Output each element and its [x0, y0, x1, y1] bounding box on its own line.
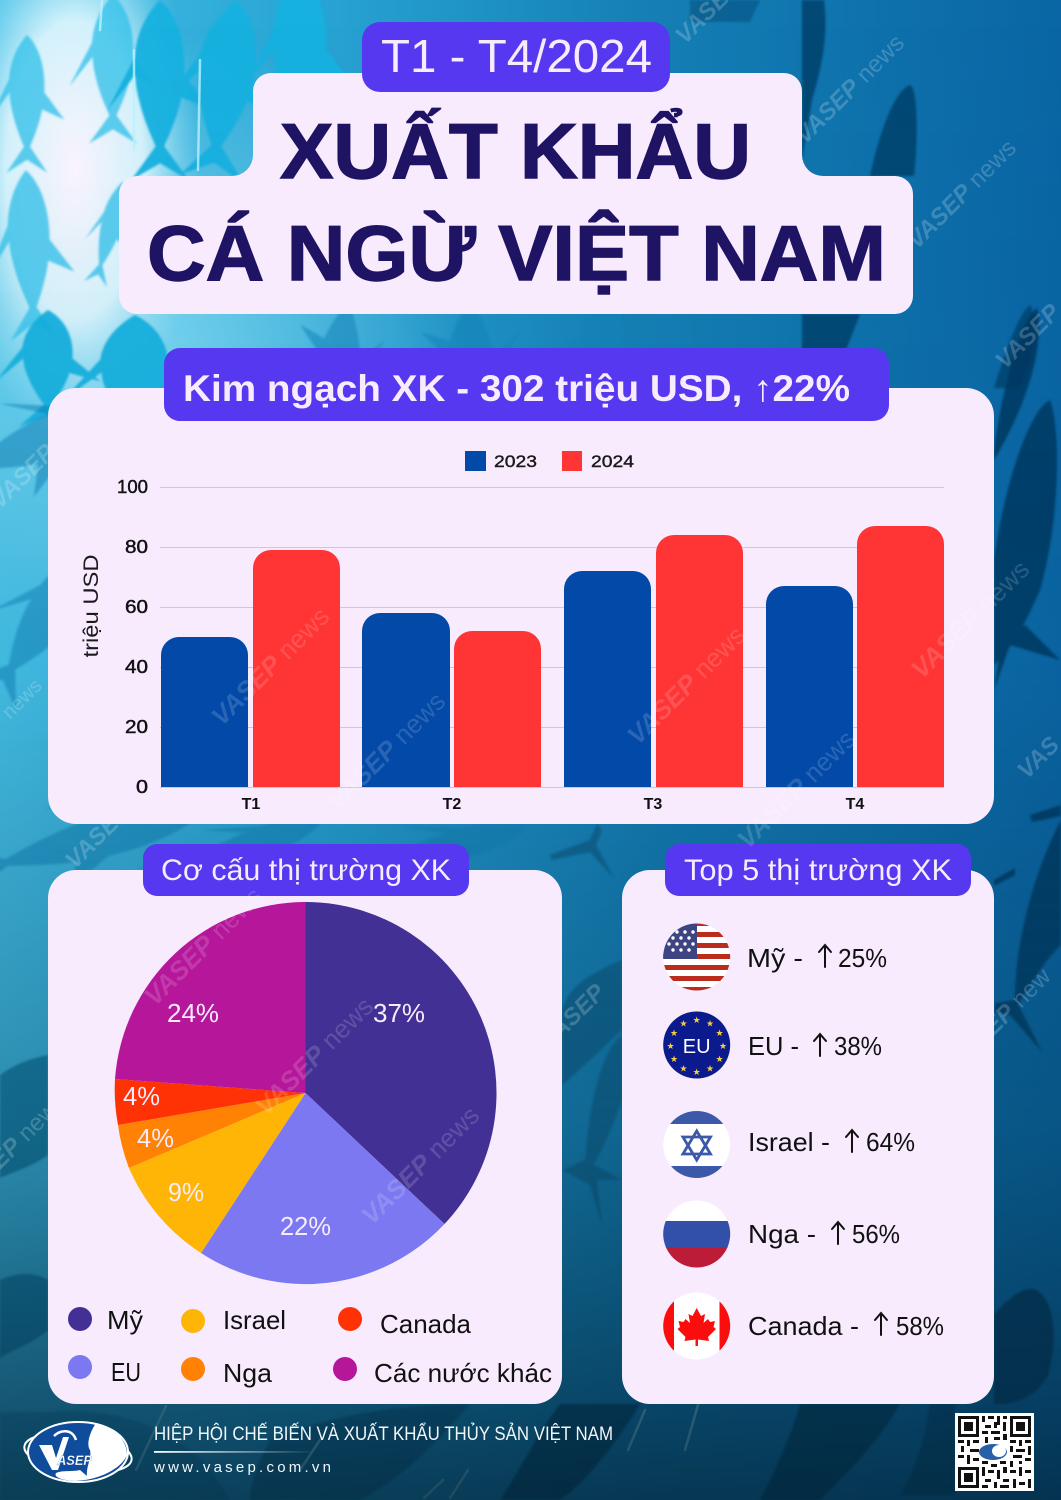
pie legend: Nga — [223, 1358, 273, 1388]
light fish top left — [0, 0, 156, 342]
icon: EU flag: ★ — [715, 1054, 724, 1064]
y axis — [117, 477, 148, 797]
icon: EU flag: ★ — [693, 1067, 701, 1077]
pie legend: Canada — [380, 1309, 472, 1339]
footer text: HIỆP HỘI CHẾ BIẾN VÀ XUẤT KHẨU THỦY SẢN VIỆT NAM — [154, 1423, 613, 1445]
icon: EU flag: ★ — [719, 1041, 727, 1051]
pie chart: 22% — [280, 1211, 331, 1241]
panel: top 5 markets — [622, 870, 994, 1404]
row: Israel: Israel - — [748, 1127, 830, 1157]
icon: EU flag — [663, 1011, 731, 1079]
row: Russia: 56% — [852, 1219, 900, 1249]
pie legend: EU — [111, 1357, 141, 1387]
icon: EU flag: ★ — [706, 1064, 714, 1074]
footer text — [153, 1423, 613, 1476]
dark fish right margin — [994, 308, 1061, 1052]
watermarks over panels: VASEP news — [138, 881, 268, 1011]
watermarks over panels: VASEP news — [249, 991, 379, 1121]
chart legend — [465, 451, 634, 471]
watermarks over panels: VASEP news — [205, 601, 335, 731]
y axis: 20 — [125, 717, 148, 737]
watermarks over panels: VASEP news — [731, 724, 861, 854]
row: Canada — [748, 1311, 944, 1341]
pie legend: Mỹ — [107, 1305, 143, 1335]
icon: Russia flag — [663, 1200, 731, 1269]
icon: EU flag: ★ — [670, 1054, 678, 1064]
QR code — [955, 1413, 1034, 1491]
watermarks over panels: VASEP news — [321, 686, 451, 816]
pie chart: 9% — [168, 1177, 204, 1207]
row: US — [747, 943, 887, 973]
title panel — [119, 73, 913, 314]
heading: export value: Kim ngạch XK - 302 triệu USD, ↑22% — [183, 368, 850, 409]
watermarks behind panels: VASEP new — [945, 963, 1057, 1074]
icon: Israel flag — [663, 1111, 731, 1179]
row: Canada: 58% — [896, 1311, 944, 1341]
watermarks over panels: VASEP news — [905, 554, 1035, 684]
title — [147, 107, 886, 297]
row: US: 25% — [838, 943, 887, 973]
icon: EU flag: ★ — [706, 1018, 714, 1028]
row: Israel — [748, 1127, 915, 1157]
y axis: 60 — [125, 597, 148, 617]
heading: top 5: Top 5 thị trường XK — [684, 854, 952, 887]
market list — [747, 943, 944, 1341]
icon: EU flag: ★ — [679, 1064, 688, 1074]
icon: US flag — [663, 923, 731, 992]
panel: market structure — [48, 870, 562, 1404]
logo: VASEP: ASEP — [56, 1452, 93, 1468]
row: EU: EU - — [748, 1031, 799, 1061]
watermarks over panels: VASEP news — [621, 620, 751, 750]
x axis labels: T3 — [644, 796, 662, 813]
icon: EU flag: ★ — [666, 1041, 675, 1051]
panel: export value chart — [48, 388, 994, 824]
pie legend: Israel — [223, 1305, 286, 1335]
dark fish top right — [690, 0, 1035, 388]
row: Russia: Nga - — [748, 1219, 816, 1249]
icon: EU flag: ★ — [679, 1018, 688, 1028]
period badge: T1 - T4/2024 — [381, 30, 652, 82]
strip fish between the lower panels — [550, 824, 622, 1225]
watermarks behind panels: VASEP news — [902, 135, 1022, 254]
row: Israel: 64% — [866, 1127, 915, 1157]
heading: export value — [164, 348, 889, 421]
watermarks over panels — [138, 554, 1035, 1230]
x axis labels — [242, 796, 864, 813]
title: XUẤT KHẨU — [280, 107, 751, 195]
icon: Canada flag — [663, 1292, 732, 1360]
heading: top 5 — [665, 844, 971, 896]
chart legend: 2024 — [591, 452, 634, 471]
row: EU — [748, 1031, 882, 1061]
heading: market structure: Cơ cấu thị trường XK — [161, 854, 451, 887]
x axis labels: T1 — [242, 796, 260, 813]
dark fish along the footer — [250, 1404, 955, 1500]
watermarks behind panels: VASEP news — [790, 30, 910, 149]
row: EU: 38% — [834, 1031, 882, 1061]
watermarks behind panels — [0, 0, 1061, 1174]
pie chart — [115, 902, 497, 1284]
chart legend: 2023 — [494, 452, 537, 471]
watermarks behind panels: VASEP news — [60, 755, 180, 874]
y axis: 40 — [125, 657, 148, 677]
footer text: www.vasep.com.vn — [153, 1459, 331, 1476]
icon: EU flag: EU — [683, 1036, 711, 1058]
x axis labels: T2 — [443, 796, 461, 813]
y axis: 80 — [125, 537, 148, 557]
y axis title: triệu USD — [80, 554, 103, 658]
watermarks behind panels: VASEP — [535, 978, 611, 1054]
row: Canada: Canada - — [748, 1311, 859, 1341]
y axis: 100 — [117, 477, 148, 497]
bars — [161, 526, 944, 787]
pie chart: 37% — [373, 998, 425, 1028]
period badge — [362, 22, 670, 92]
pie legend: Các nước khác — [374, 1358, 552, 1388]
icon: EU flag: ★ — [693, 1015, 701, 1025]
row: Russia — [748, 1219, 900, 1249]
pie chart: 24% — [167, 998, 219, 1028]
logo: VASEP — [22, 1422, 134, 1482]
row: US: Mỹ - — [747, 943, 803, 973]
heading: market structure — [143, 844, 469, 896]
watermarks over panels: VASEP news — [355, 1100, 485, 1230]
pie legend — [68, 1305, 552, 1388]
icon: EU flag: ★ — [715, 1028, 724, 1038]
y axis: 0 — [136, 777, 148, 797]
title: CÁ NGỪ VIỆT NAM — [147, 209, 886, 297]
pie chart: 4% — [123, 1081, 160, 1111]
x axis labels: T4 — [846, 796, 864, 813]
icon: EU flag: ★ — [670, 1028, 678, 1038]
pie chart: 4% — [137, 1123, 174, 1153]
